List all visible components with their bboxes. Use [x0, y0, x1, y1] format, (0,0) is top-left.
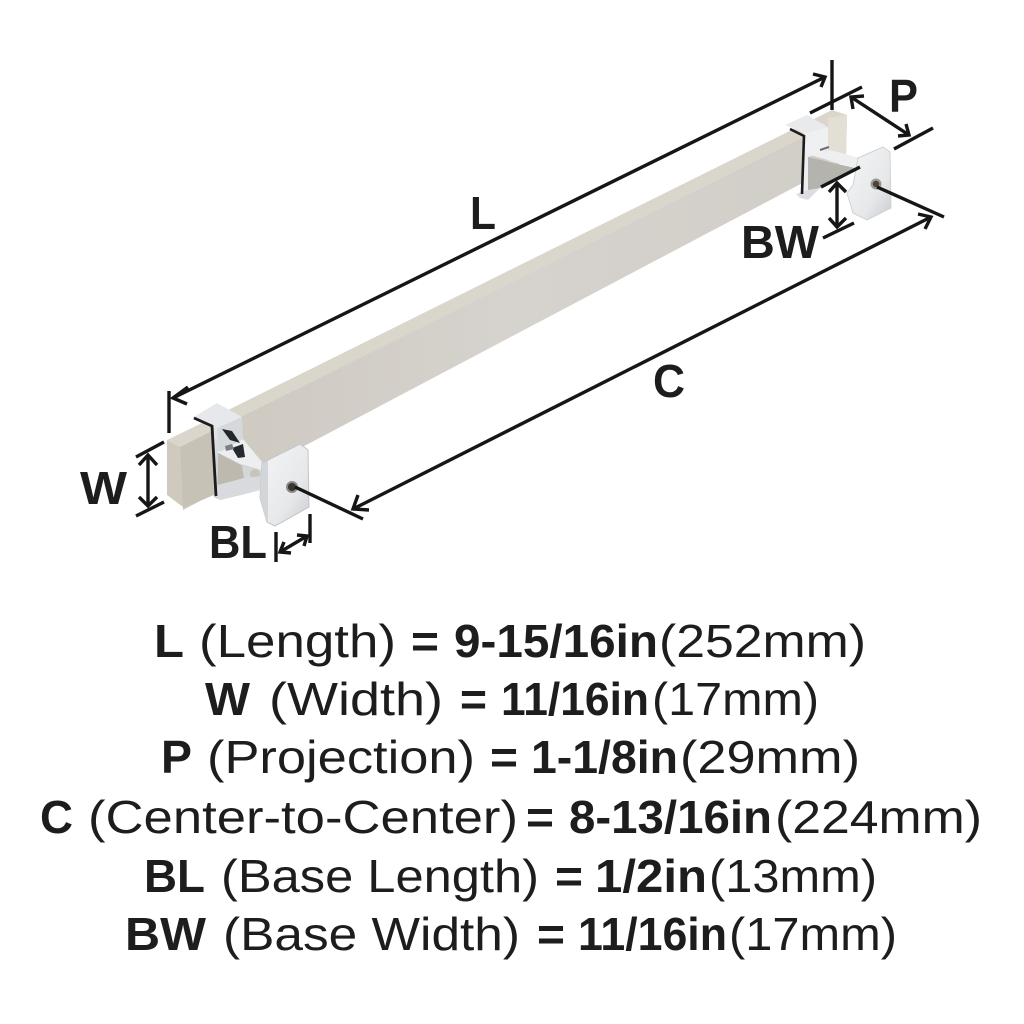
- dimension P: projection arrow: [810, 87, 933, 149]
- row: width: (17mm): [652, 673, 819, 725]
- label W: W: [80, 462, 128, 514]
- row: center-to-center: =: [526, 791, 554, 843]
- left base plate: [260, 444, 309, 526]
- row: length: =: [411, 615, 439, 667]
- row: length: L: [154, 615, 184, 667]
- row: base length: 1/2in: [595, 850, 707, 902]
- row: base width: 11/16in: [578, 908, 727, 960]
- row: base width: BW: [125, 908, 207, 960]
- product photo: cabinet pull: [167, 110, 891, 526]
- row: projection: =: [490, 731, 518, 783]
- row: base length: BL: [144, 850, 205, 902]
- dimension BL: base length arrow: [276, 514, 310, 562]
- row: base length: (Base Length): [221, 850, 539, 902]
- row: width: =: [460, 673, 487, 725]
- label L: L: [470, 187, 496, 239]
- label BW: BW: [741, 216, 820, 268]
- row: center-to-center: (Center-to-Center): [88, 791, 518, 843]
- row: projection: (29mm): [680, 731, 860, 783]
- label BL: BL: [209, 516, 267, 568]
- row: center-to-center: 8-13/16in: [569, 791, 772, 843]
- row: length: [154, 615, 866, 667]
- label C: C: [653, 355, 685, 407]
- row: projection: (Projection): [207, 731, 475, 783]
- dimension L: length arrow: [169, 60, 832, 433]
- row: length: (252mm): [659, 615, 866, 667]
- right base plate: [847, 147, 891, 220]
- row: length: 9-15/16in: [454, 615, 658, 667]
- row: width: 11/16in: [501, 673, 649, 725]
- row: center-to-center: C: [40, 791, 73, 843]
- row: base length: [144, 850, 877, 902]
- row: width: [205, 673, 819, 725]
- row: base width: =: [537, 908, 565, 960]
- dimension BW: base width arrow: [821, 167, 860, 238]
- dimension table: [40, 615, 982, 960]
- row: base width: (17mm): [729, 908, 897, 960]
- row: width: W: [205, 673, 251, 725]
- handle bar: [167, 110, 847, 510]
- row: base width: [125, 908, 897, 960]
- row: projection: 1-1/8in: [531, 731, 678, 783]
- dimension W: width arrow: [136, 442, 164, 516]
- right mount: [785, 115, 860, 200]
- row: base length: =: [555, 850, 583, 902]
- label P: P: [889, 70, 918, 122]
- row: length: (Length): [199, 615, 396, 667]
- row: base length: (13mm): [709, 850, 877, 902]
- row: projection: [161, 731, 860, 783]
- left mount: [192, 403, 262, 500]
- row: width: (Width): [269, 673, 443, 725]
- dimension C: center-to-center arrow: [295, 187, 944, 519]
- row: center-to-center: (224mm): [775, 791, 982, 843]
- row: base width: (Base Width): [223, 908, 520, 960]
- row: projection: P: [161, 731, 192, 783]
- row: center-to-center: [40, 791, 982, 843]
